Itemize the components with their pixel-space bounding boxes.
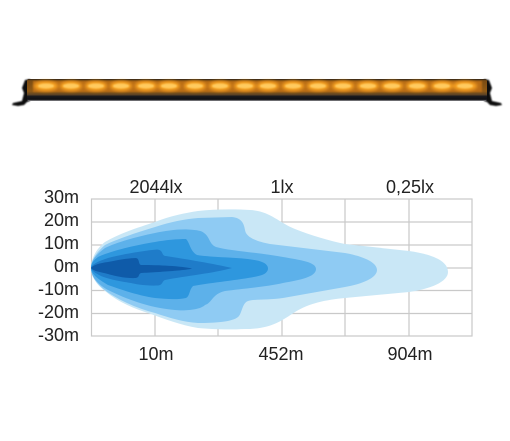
contour: 1 lx zone [91, 217, 377, 323]
contour: mid zone [91, 229, 316, 310]
distance labels: 452m [258, 344, 304, 364]
y axis labels [38, 187, 79, 345]
y axis labels: -10m [38, 279, 79, 299]
distance labels [138, 344, 433, 364]
contour: high zone [91, 250, 232, 286]
LED lights [34, 81, 477, 91]
contour: 0.25 lx zone [91, 209, 448, 329]
lux labels: 2044lx [129, 177, 183, 197]
distance labels: 10m [138, 344, 174, 364]
contour: hotspot [91, 258, 192, 278]
light bar [12, 79, 502, 106]
y axis labels: 20m [44, 210, 79, 230]
icon: right mounting bracket [484, 79, 502, 106]
chart grid [92, 199, 472, 336]
lux labels: 0,25lx [386, 177, 434, 197]
lux labels [129, 177, 434, 197]
bar housing [27, 79, 487, 101]
contour: inner zone [91, 239, 268, 299]
y axis labels: 30m [44, 187, 79, 207]
icon: left mounting bracket [12, 79, 30, 106]
y axis labels: -20m [38, 302, 79, 322]
y axis labels: 10m [44, 233, 79, 253]
y axis labels: 0m [54, 256, 79, 276]
chart: beam pattern [38, 177, 472, 364]
lux labels: 1lx [270, 177, 294, 197]
distance labels: 904m [387, 344, 433, 364]
beam contours [91, 209, 448, 329]
amber light strip [33, 81, 482, 92]
y axis labels: -30m [38, 325, 79, 345]
